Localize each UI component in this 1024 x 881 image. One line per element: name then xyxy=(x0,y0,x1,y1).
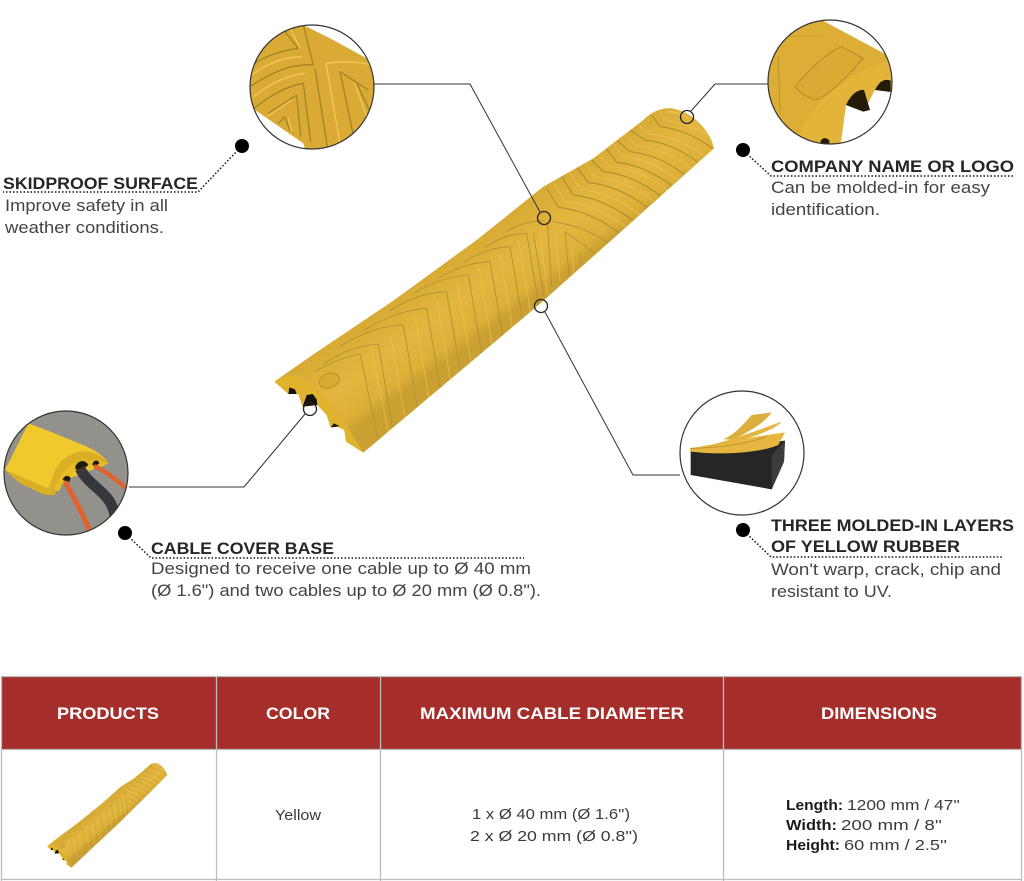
table cell: dimensions: Length: xyxy=(786,797,843,814)
text: skidproof surface: Improve safety in all xyxy=(5,197,168,215)
text: three molded-in layers: resistant to UV. xyxy=(771,583,892,601)
leader line: cable cover base xyxy=(129,414,305,487)
table cell: dimensions: 1200 mm / 47'' xyxy=(847,797,960,814)
table cell: dimensions: 60 mm / 2.5'' xyxy=(844,837,947,854)
text: company name or logo xyxy=(771,179,991,219)
heading: skidproof surface: SKIDPROOF SURFACE xyxy=(3,174,198,193)
photo circle: company logo detail xyxy=(767,19,893,145)
text: cable cover base: (Ø 1.6") and two cables up to Ø 20 mm (Ø 0.8"). xyxy=(151,582,541,600)
specification table xyxy=(1,676,1022,881)
leader line: company name or logo xyxy=(691,84,768,111)
callout: company name or logo xyxy=(680,10,1015,219)
heading: cable cover base: CABLE COVER BASE xyxy=(151,539,334,558)
heading: three molded-in layers: THREE MOLDED-IN LAYERS xyxy=(771,516,1014,535)
callout: cable cover base xyxy=(4,402,541,600)
pointer: three molded-in layers xyxy=(736,523,1003,557)
text: company name or logo: identification. xyxy=(771,201,880,219)
photo circle: cable cover with cables xyxy=(4,411,129,535)
heading: company name or logo: COMPANY NAME OR LOGO xyxy=(771,157,1014,176)
cable cover product image xyxy=(274,108,720,453)
table thumbnail: cable cover xyxy=(47,763,169,868)
text: cable cover base: Designed to receive one cable up to Ø 40 mm xyxy=(151,560,531,578)
photo circle: rubber layers xyxy=(680,391,804,515)
marker: skidproof surface xyxy=(538,212,550,224)
heading: three molded-in layers: OF YELLOW RUBBER xyxy=(771,537,960,556)
table cell: dimensions: Height: xyxy=(786,837,840,854)
text: skidproof surface: weather conditions. xyxy=(4,219,164,237)
marker: cable cover base xyxy=(304,402,316,416)
table header row: MAXIMUM CABLE DIAMETER xyxy=(420,704,684,723)
marker: company name or logo xyxy=(680,110,694,124)
table cell: dimensions xyxy=(786,797,960,854)
leader line: three molded-in layers xyxy=(545,312,680,475)
pointer: company name or logo xyxy=(736,143,1015,176)
table header row: COLOR xyxy=(266,704,330,723)
table cell: dimensions: Width: xyxy=(786,817,837,834)
table cell: maximum cable diameter xyxy=(470,806,638,845)
table cell: color: Yellow xyxy=(275,807,321,824)
leader line: skidproof surface xyxy=(374,84,540,212)
callout: skidproof surface xyxy=(3,15,550,237)
text: three molded-in layers xyxy=(771,561,1001,601)
callout: three molded-in layers xyxy=(534,300,1014,601)
table cell: dimensions: 200 mm / 8'' xyxy=(841,817,942,834)
text: three molded-in layers: Won't warp, crack, chip and xyxy=(771,561,1001,579)
pointer: skidproof surface xyxy=(3,139,249,192)
table cell: maximum cable diameter: 1 x Ø 40 mm (Ø 1.6'') xyxy=(472,806,630,823)
table header row xyxy=(1,676,1022,749)
text: cable cover base xyxy=(151,560,541,600)
table header row: PRODUCTS xyxy=(57,704,159,723)
table header row: DIMENSIONS xyxy=(821,704,937,723)
marker: three molded-in layers xyxy=(534,300,548,312)
pointer: cable cover base xyxy=(118,526,524,558)
text: skidproof surface xyxy=(4,197,168,237)
heading: three molded-in layers xyxy=(771,516,1014,556)
text: company name or logo: Can be molded-in for easy xyxy=(771,179,991,197)
photo circle: skidproof surface detail xyxy=(249,24,375,150)
table cell: maximum cable diameter: 2 x Ø 20 mm (Ø 0.8'') xyxy=(470,828,638,845)
